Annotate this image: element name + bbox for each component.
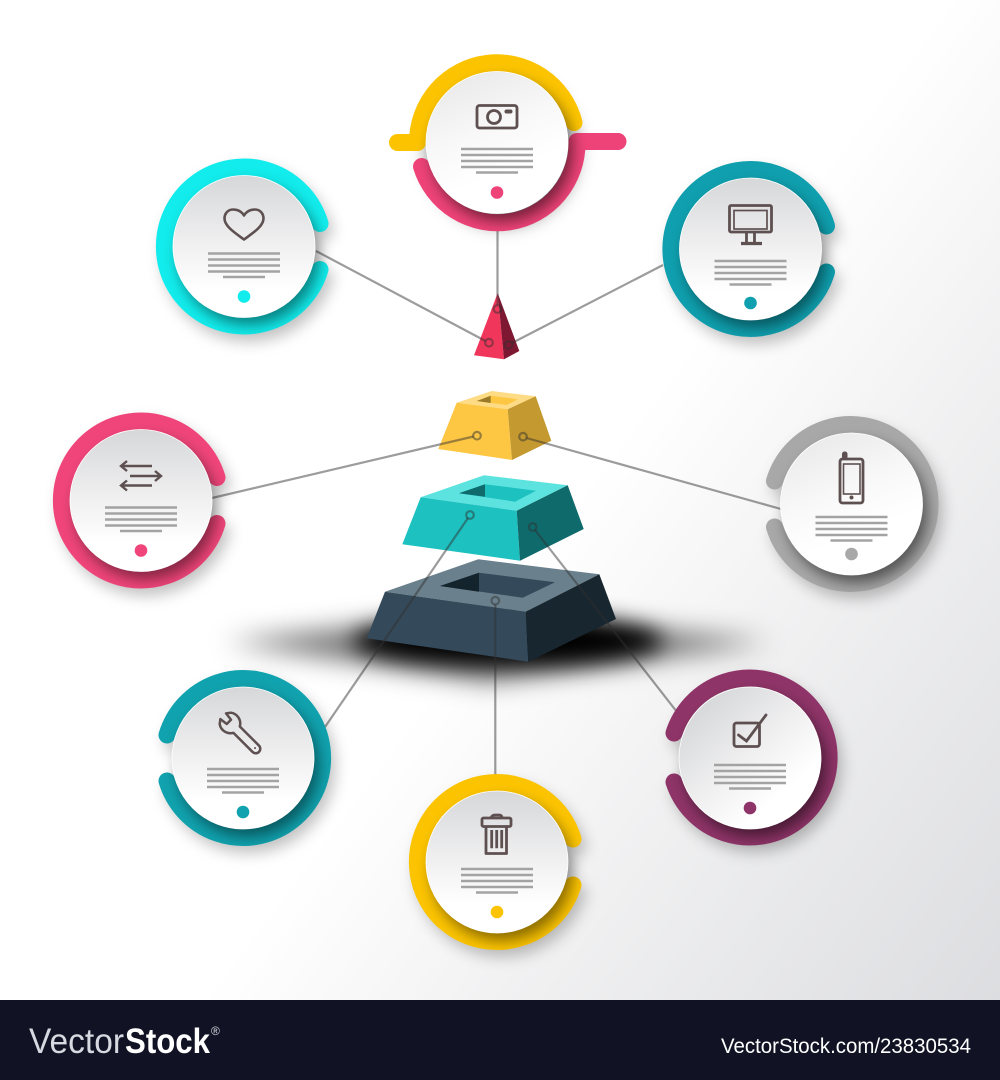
pyramid level: red apex: [474, 293, 519, 359]
node: heart: [164, 167, 325, 334]
node: checkbox: [674, 678, 834, 845]
pyramid level: yellow: [438, 391, 551, 460]
dot: [238, 290, 250, 303]
dot: [744, 802, 756, 814]
text lines: [461, 869, 533, 892]
icon: checkbox: [734, 715, 766, 746]
footer bar: [0, 1000, 1000, 1080]
footer url: VectorStock.com/23830534: [721, 1035, 971, 1058]
dot: [845, 548, 858, 560]
icon: trash can: [482, 815, 511, 854]
footer logo: Stock: [125, 1022, 210, 1061]
pyramid level: teal: [402, 475, 584, 561]
node: camera: [398, 63, 618, 233]
dot: [237, 806, 249, 818]
footer logo: ®: [211, 1024, 220, 1038]
dot: [135, 544, 147, 557]
node: monitor: [671, 170, 832, 337]
text lines: [105, 508, 177, 531]
node: wrench: [167, 678, 328, 846]
icon: phone: [840, 452, 863, 503]
icon: camera: [477, 106, 517, 128]
dot: [744, 297, 757, 309]
node: trash: [417, 782, 578, 950]
floor shadow: [225, 612, 770, 682]
node: arrows: [61, 421, 222, 588]
icon: arrows: [121, 461, 161, 490]
dot: [491, 186, 503, 199]
icon: wrench: [216, 709, 266, 759]
pyramid: [367, 293, 616, 662]
icon: monitor: [730, 206, 772, 244]
pyramid level: dark base: [367, 559, 616, 662]
footer logo: Vector: [29, 1022, 124, 1061]
text lines: [208, 254, 280, 277]
text lines: [207, 769, 279, 792]
text lines: [461, 149, 533, 172]
text lines: [816, 517, 888, 540]
connector lines: [212, 225, 781, 780]
text lines: [714, 261, 786, 284]
icon: heart: [224, 210, 264, 240]
text lines: [714, 765, 786, 788]
node: phone: [774, 424, 935, 592]
dot: [491, 906, 503, 918]
